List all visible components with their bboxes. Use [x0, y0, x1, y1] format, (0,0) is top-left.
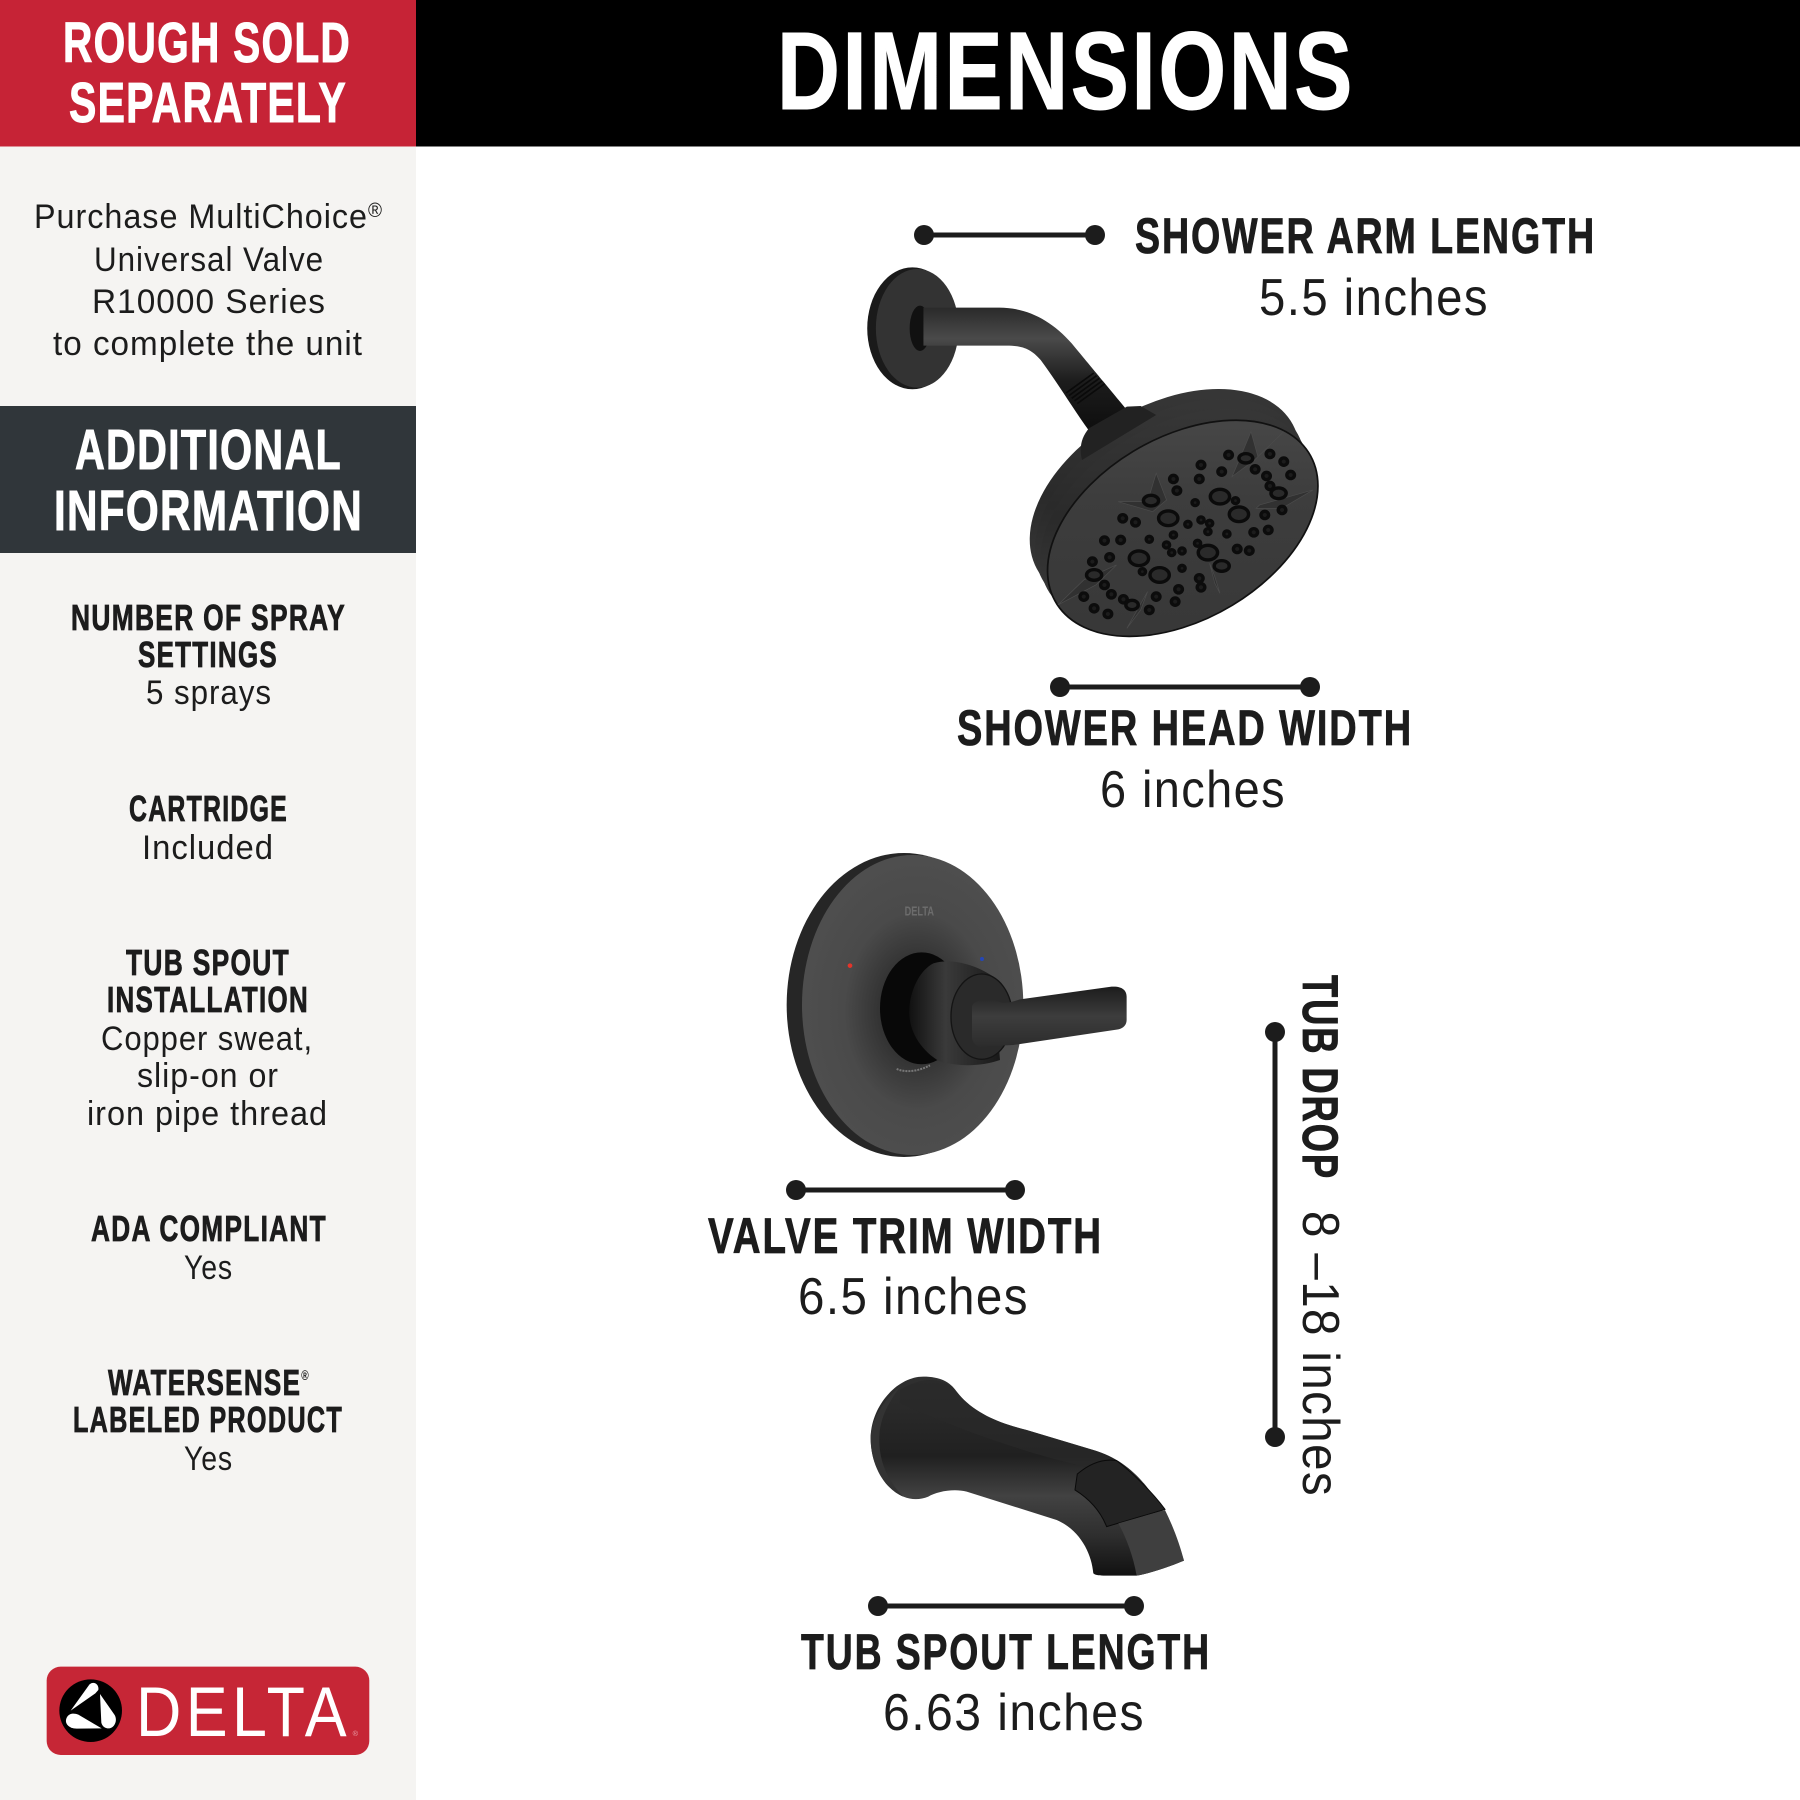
label: tub spout length: TUB SPOUT LENGTH [801, 1624, 1211, 1680]
illustration: tub spout [871, 1377, 1184, 1576]
logo: delta: DELTA [136, 1672, 351, 1751]
illustration: shower head and arm [867, 267, 1358, 681]
spec: tub spout installation [87, 942, 328, 1133]
spout body [871, 1377, 1184, 1576]
handle cylinder [909, 961, 1000, 1065]
spec: cartridge: Included [142, 829, 274, 867]
large nozzles [1087, 454, 1286, 610]
label: shower arm length: 5.5 inches [1259, 269, 1489, 327]
label: tub drop: 8 –18 inches [1291, 1211, 1349, 1497]
spec: ada compliant [91, 1208, 327, 1287]
illustration: valve trim [787, 853, 1127, 1157]
logo mark on plate: DELTA [905, 905, 934, 919]
trim plate edge [787, 853, 1021, 1157]
spout tip facet [1118, 1510, 1184, 1576]
heading: additional information: ADDITIONAL [75, 418, 342, 482]
label: tub spout length: 6.63 inches [883, 1684, 1145, 1742]
hot indicator [848, 963, 852, 968]
heading: additional information: INFORMATION [54, 479, 363, 543]
spec: watersense labeled product: WATERSENSE [108, 1362, 375, 1403]
handle cap [951, 974, 1012, 1059]
logo: delta: ® [353, 1729, 359, 1738]
label: valve trim width: VALVE TRIM WIDTH [708, 1208, 1103, 1264]
text block: purchase valve note [34, 198, 383, 363]
spec: tub spout installation: iron pipe thread [87, 1095, 328, 1133]
logo: delta [47, 1667, 369, 1755]
spec: tub spout installation: Copper sweat, [101, 1020, 313, 1058]
label: valve trim width [708, 1208, 1103, 1326]
text block: purchase valve note: Universal Valve [94, 241, 324, 279]
head body [990, 344, 1350, 669]
spec: number of spray settings: NUMBER OF SPRAY [71, 597, 346, 638]
text block: purchase valve note: R10000 Series [92, 283, 326, 321]
threaded section [1066, 373, 1105, 404]
spray nozzles [1080, 450, 1294, 618]
title: dimensions [416, 0, 1800, 146]
spec: number of spray settings: 5 sprays [146, 674, 272, 712]
cold indicator [980, 957, 984, 961]
spec: ada compliant: Yes [184, 1249, 233, 1287]
shower arm [923, 308, 1127, 431]
header: rough sold separately [0, 0, 416, 146]
spout flange edge [871, 1385, 903, 1497]
dimension line: tub spout [868, 1596, 1144, 1616]
spec: watersense labeled product: LABELED PRODUCT [73, 1399, 343, 1440]
spec: cartridge: CARTRIDGE [129, 788, 288, 829]
label: shower arm length [1135, 208, 1596, 327]
spec: tub spout installation: INSTALLATION [107, 979, 309, 1020]
text block: purchase valve note: Purchase MultiChoice [34, 198, 385, 236]
spec: number of spray settings [71, 597, 346, 712]
title: dimensions: DIMENSIONS [777, 10, 1355, 133]
text block: purchase valve note: to complete the unit [53, 325, 363, 363]
flange [867, 267, 959, 389]
spec: number of spray settings: SETTINGS [138, 634, 278, 675]
dimension line: shower head [1050, 677, 1320, 697]
engraved mark [897, 1065, 930, 1071]
collar [1081, 406, 1156, 460]
label: shower head width: 6 inches [1100, 761, 1286, 819]
label: tub spout length [801, 1624, 1211, 1742]
label: shower head width [957, 700, 1413, 819]
lever [972, 987, 1127, 1047]
label: valve trim width: 6.5 inches [798, 1268, 1029, 1326]
spec: ada compliant: ADA COMPLIANT [91, 1208, 327, 1249]
spec: watersense labeled product: Yes [184, 1440, 233, 1478]
label: shower arm length: SHOWER ARM LENGTH [1135, 208, 1596, 264]
spec: watersense labeled product: ® [301, 1367, 310, 1383]
text block: purchase valve note: ® [368, 200, 383, 222]
upper highlight band [900, 1380, 1112, 1467]
spec: tub spout installation: TUB SPOUT [126, 942, 290, 983]
trim plate face [802, 855, 1023, 1155]
spec: cartridge [129, 788, 288, 867]
label: tub drop: TUB DROP [1292, 975, 1348, 1180]
face ridges [1058, 432, 1313, 628]
panel: left sidebar background [0, 0, 416, 1800]
dimension line: tub drop [1265, 1022, 1285, 1447]
header: rough sold separately: SEPARATELY [69, 71, 347, 135]
header: rough sold separately: ROUGH SOLD [63, 11, 351, 75]
dimension line: valve trim [786, 1180, 1025, 1200]
spec: watersense labeled product [73, 1362, 343, 1478]
label: shower head width: SHOWER HEAD WIDTH [957, 700, 1413, 756]
label: tub drop [1291, 975, 1349, 1497]
dimension line: shower arm [914, 225, 1105, 245]
hub [880, 952, 963, 1064]
head face [1007, 375, 1358, 681]
heading: additional information [0, 406, 416, 553]
spec: tub spout installation: slip-on or [137, 1057, 279, 1095]
diverter panel [1075, 1460, 1165, 1527]
